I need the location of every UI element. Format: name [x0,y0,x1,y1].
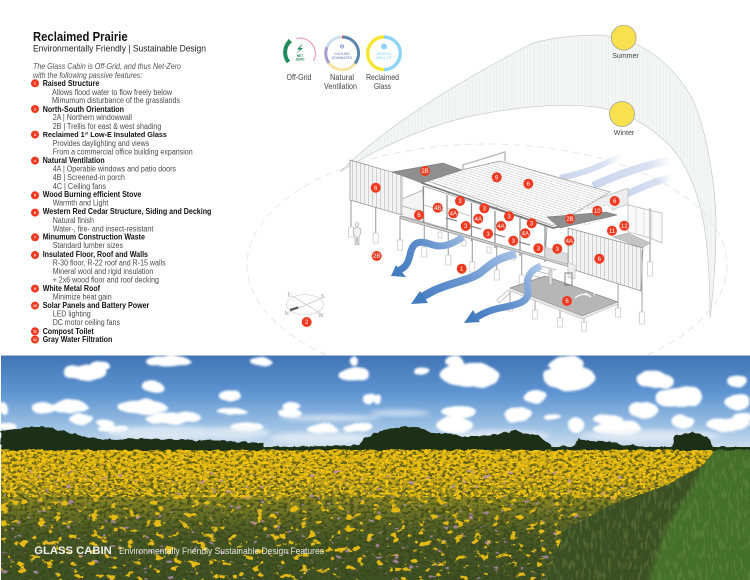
roof eave [416,178,562,228]
marker 9 roof [492,172,502,182]
label: reclaimed glass [366,73,399,91]
marker 11 [607,226,617,236]
marker 3 [455,196,465,206]
panel: heading and feature list [31,30,211,344]
marker 2 compass: 2 [305,320,309,326]
marker 3: 3 [464,224,468,230]
intro text [33,62,181,80]
marker 6 deck [562,296,572,306]
item 2 orientation: 2B | Trellis for east & west shading [53,122,161,131]
intro text: with the following passive features: [33,71,142,80]
item 8 insulation: Insulated Floor, Roof and Walls [43,250,148,259]
marker 2B left trellis [420,166,430,176]
photo caption: Environmentally Friendly Sustainable Design Features [119,546,324,556]
marker 4A right [564,236,574,246]
marker 3 [483,229,493,239]
compass: orientation: S [321,294,325,300]
label: natural ventilation: Ventilation [324,82,357,91]
item 1 raised structure: 1 [34,82,36,86]
item 10 solar: Solar Panels and Battery Power [43,301,149,310]
icon: reclaimed glass ring [368,37,400,70]
marker 6 porch: 6 [417,213,421,219]
marker 4A [448,208,458,218]
glass facade [400,186,568,266]
marker 4B [433,203,443,213]
site boundary dashed ellipse [247,144,727,386]
item 8 insulation: + 2x6 wood floor and roof decking [53,276,159,285]
item 10 solar: 10 [33,304,37,308]
item 3 glass: Provides daylighting and views [53,139,149,148]
compass: orientation [285,292,325,319]
item 10 solar: DC motor ceiling fans [53,318,120,327]
item 12 water: Gray Water Filtration [43,335,112,344]
item 7 waste: Minumum Construction Waste [43,233,145,242]
marker 12 [619,221,629,231]
title: Reclaimed Prairie [33,30,128,44]
marker 3: 3 [556,247,560,253]
icon: off-grid net zero gauge: NET [297,54,303,58]
item 4 ventilation: 4 [34,159,36,163]
item 8 insulation [31,250,166,285]
item 12 water: 12 [33,338,37,342]
item 4 ventilation: 4A | Operable windows and patio doors [53,165,176,174]
marker 6 right wall [594,254,604,264]
item 9 roof [31,284,112,302]
item 3 glass: From a commercial office building expansion [53,148,193,157]
label: natural ventilation [324,73,357,91]
marker 4A: 4A [522,231,529,237]
item 8 insulation: 8 [34,253,36,257]
marker 4A [496,221,506,231]
label: reclaimed glass: Glass [374,82,391,91]
marker 3 [504,211,514,221]
chart: sun path band [340,35,716,318]
stilts [348,187,524,285]
marker 3: 3 [530,221,534,227]
marker 3 [527,218,537,228]
marker 9 roof: 9 [495,175,499,181]
icon: off-grid net zero gauge [285,38,315,62]
tree line low horizon [264,426,750,450]
figure: person for scale [353,223,361,245]
item 6 cedar: Western Red Cedar Structure, Siding and Decking [43,207,211,216]
item 3 glass: Low-E Insulated Glass [88,130,167,139]
item 1 raised structure: Mimumum disturbance of the grasslands [52,96,180,105]
item 5 stove: Warmth and Light [53,199,109,208]
arrow: airflow under deck [464,266,541,323]
marker 2B right trellis: 2B [566,217,574,223]
arrow: airflow west [391,237,463,277]
icon: off-grid net zero gauge: ZERO [296,58,305,62]
marker 2B left trellis: 2B [421,169,429,175]
marker 3: 3 [512,239,516,245]
clouds [0,355,750,435]
icon: winter sun [610,102,634,126]
item 3 glass: st [85,131,89,136]
marker 1: 1 [460,267,464,273]
item 6 cedar: 6 [34,211,36,215]
item 2 orientation: 2A | Northern windowwall [53,113,132,122]
label: winter: Winter [614,128,635,137]
item 7 waste [31,233,145,250]
marker 4B: 4B [434,206,441,212]
label: reclaimed glass: Reclaimed [366,73,399,82]
stairs [531,266,556,285]
wildflowers [1,449,721,580]
marker 3: 3 [507,214,511,220]
illustration: cabin [348,152,662,331]
marker 3: 3 [458,199,462,205]
item 3 glass: Reclaimed 1 [43,130,85,139]
item 5 stove [31,190,142,208]
icon: natural ventilation ring: COOLING [334,52,350,56]
item 5 stove: 5 [34,194,36,198]
item 1 raised structure [31,79,180,105]
marker 3 [552,244,562,254]
callouts: numbered markers on cabin [302,166,629,327]
item 10 solar: LED lighting [53,310,91,319]
marker 6 left wall [371,183,381,193]
marker 4A: 4A [475,217,482,223]
marker 12: 12 [621,224,628,230]
sky [1,356,750,450]
item 11 toilet: 11 [33,330,37,334]
item 7 waste: 7 [34,236,36,240]
item 6 cedar: Natural finish [53,216,94,225]
marker 3 [461,221,471,231]
marker 6 left wall: 6 [374,186,378,192]
compass: orientation: E [287,292,291,298]
marker 4A [473,214,483,224]
compass: orientation: N [285,311,289,317]
label: natural ventilation: Natural [330,73,354,82]
front deck [497,250,644,331]
marker 6 rear: 6 [613,199,617,205]
icon: natural ventilation ring: ❄ [339,43,345,51]
photo: prairie panorama [0,355,750,580]
item 4 ventilation: 4C | Ceiling fans [53,182,106,191]
rear bath wing [580,188,662,276]
item 9 roof: White Metal Roof [43,284,100,293]
intro text: The Glass Cabin is Off-Grid, and thus Net-Zero [33,62,181,71]
right end siding wall [568,228,643,291]
marker 2B ground: 2B [373,254,380,260]
marker 3 [533,243,543,253]
marker 4A [520,228,530,238]
item 1 raised structure: Allows flood water to flow freely below [52,88,172,97]
marker 6 porch [414,210,424,220]
icon: summer sun [611,25,636,50]
tree line left [1,427,264,450]
marker 4A: 4A [497,224,505,230]
item 6 cedar [31,207,211,234]
marker 11: 11 [609,229,616,235]
subtitle: Environmentally Friendly | Sustainable Design [33,44,206,54]
label: off-grid: Off-Grid [286,73,312,82]
left end siding wall [350,160,402,215]
mown grass path [645,449,750,580]
photo caption: GLASS CABIN [34,545,112,557]
item 9 roof: 9 [34,287,36,291]
item 2 orientation [31,105,161,131]
icon: reclaimed glass ring: MOSTLY [377,52,392,56]
marker 3 [508,236,518,246]
item 3 glass: 3 [34,133,36,137]
item 6 cedar: Water-, fire- and insect-resistant [53,225,154,234]
icon: natural ventilation ring [326,36,359,70]
marker 2 compass [302,317,312,327]
marker 3: 3 [483,206,487,212]
marker 6 deck: 6 [565,299,569,305]
item 8 insulation: R-30 floor, R-22 roof and R-15 walls [53,259,166,268]
photo caption [34,545,324,557]
marker 2B right trellis [565,214,575,224]
marker 3 [479,203,489,213]
marker 6 roof: 6 [527,182,531,188]
screened porch [402,190,424,222]
item 1 raised structure: Raised Structure [43,79,100,88]
marker 2B ground [372,251,382,261]
arrow: airflow under cabin [411,254,516,304]
grass texture [540,447,750,580]
right trellis [547,212,617,228]
marker 10: 10 [594,209,601,215]
item 2 orientation: North-South Orientation [43,105,124,114]
item 10 solar [31,301,149,327]
marker 1 [457,264,467,274]
item 4 ventilation: 4B | Screened-in porch [53,173,125,182]
item 4 ventilation [31,156,176,191]
marker 3: 3 [486,232,490,238]
marker 6 rear [610,196,620,206]
marker 10 [592,206,602,216]
item 5 stove: Wood Burning efficient Stove [43,190,142,199]
marker 6 right wall: 6 [598,257,602,263]
item 2 orientation: 2 [34,107,36,111]
compass: orientation: W [318,313,324,319]
wind streaks [560,155,672,194]
item 11 toilet: Compost Toilet [43,327,94,336]
item 3 glass [31,130,193,157]
hatched white metal roof [422,161,610,226]
icon: natural ventilation ring: DOMINATED [332,56,353,60]
hazy low clouds [107,410,720,444]
field base [1,447,750,580]
item 7 waste: Standard lumber sizes [53,241,123,250]
item 9 roof: Minimize heat gain [53,293,112,302]
icon: reclaimed glass ring: WELL LIT [376,56,393,60]
marker 4A: 4A [450,211,457,217]
item 8 insulation: Mineral wool and rigid insulation [53,267,153,276]
label: summer: Summer [612,51,639,60]
left trellis [392,163,462,183]
marker 4A right: 4A [566,239,573,245]
marker 6 roof [523,179,533,189]
marker 3: 3 [537,246,541,252]
item 4 ventilation: Natural Ventilation [43,156,105,165]
clerestory rail [463,152,505,170]
